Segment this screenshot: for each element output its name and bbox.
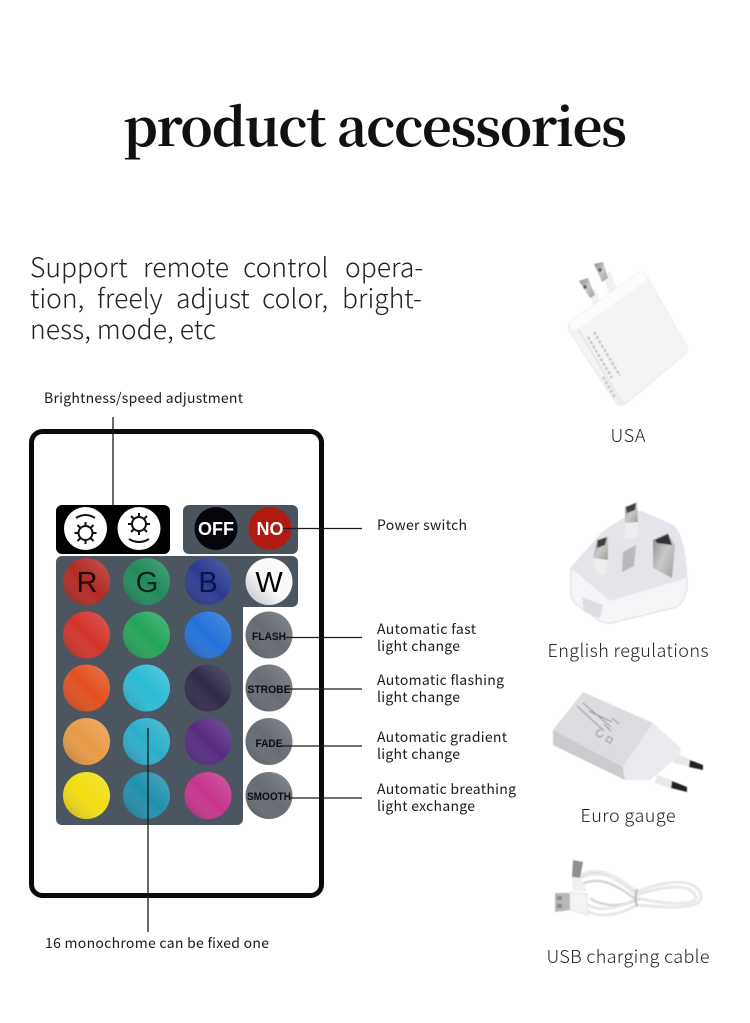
power panel: NO	[256, 519, 284, 539]
description text: adjust	[176, 277, 250, 316]
power panel	[183, 505, 298, 554]
caption: English regulations: English regulations	[548, 637, 708, 663]
label: 16 monochrome: 16 monochrome can be fixed one	[45, 933, 269, 953]
description text: ness, mode, etc	[30, 308, 216, 347]
function labels: Automatic gradient	[377, 727, 508, 747]
function labels: Automatic breathing	[377, 779, 516, 799]
function labels: light exchange	[377, 796, 475, 816]
function labels	[377, 515, 516, 816]
mode buttons: FADE	[256, 738, 282, 750]
RGBW buttons: B	[198, 567, 218, 599]
description text	[30, 246, 423, 347]
icon: UK plug	[571, 502, 687, 623]
description text: control	[243, 246, 328, 285]
remote outline	[32, 432, 322, 896]
description text: tion,	[30, 277, 84, 316]
label: brightness adjustment: Brightness/speed adjustment	[44, 388, 244, 408]
RGBW buttons: W	[255, 567, 283, 599]
RGBW buttons: R	[77, 567, 97, 599]
power panel: OFF	[198, 519, 234, 539]
caption: USA: USA	[610, 422, 646, 448]
caption: USB charging cable: USB charging cable	[546, 943, 710, 969]
description text: Support	[30, 246, 128, 285]
caption: Euro gauge: Euro gauge	[580, 802, 676, 828]
description text: color,	[262, 277, 328, 316]
colour buttons	[63, 612, 232, 819]
colour button panel	[56, 556, 298, 825]
description text: bright-	[342, 277, 422, 316]
function labels: light change	[377, 636, 460, 656]
icon: Euro plug	[553, 692, 703, 792]
function labels: Automatic fast	[377, 619, 477, 639]
function labels: Automatic flashing	[377, 670, 504, 690]
RGBW buttons	[63, 558, 292, 605]
mode buttons: FLASH	[252, 631, 286, 643]
function labels: Power switch	[377, 515, 467, 535]
brightness panel	[56, 505, 170, 554]
description text: freely	[97, 277, 163, 316]
description text: opera-	[345, 246, 423, 285]
function labels: light change	[377, 687, 460, 707]
remote control	[32, 432, 322, 896]
title: product accessories	[123, 86, 627, 161]
mode buttons	[246, 612, 292, 819]
function labels: light change	[377, 744, 460, 764]
description text: remote	[143, 246, 229, 285]
RGBW buttons: G	[136, 567, 158, 599]
mode buttons: STROBE	[248, 684, 290, 696]
icon: US adapter	[568, 262, 687, 405]
mode buttons: SMOOTH	[247, 791, 291, 803]
icon: USB cable	[555, 860, 701, 915]
leader lines	[113, 417, 362, 932]
